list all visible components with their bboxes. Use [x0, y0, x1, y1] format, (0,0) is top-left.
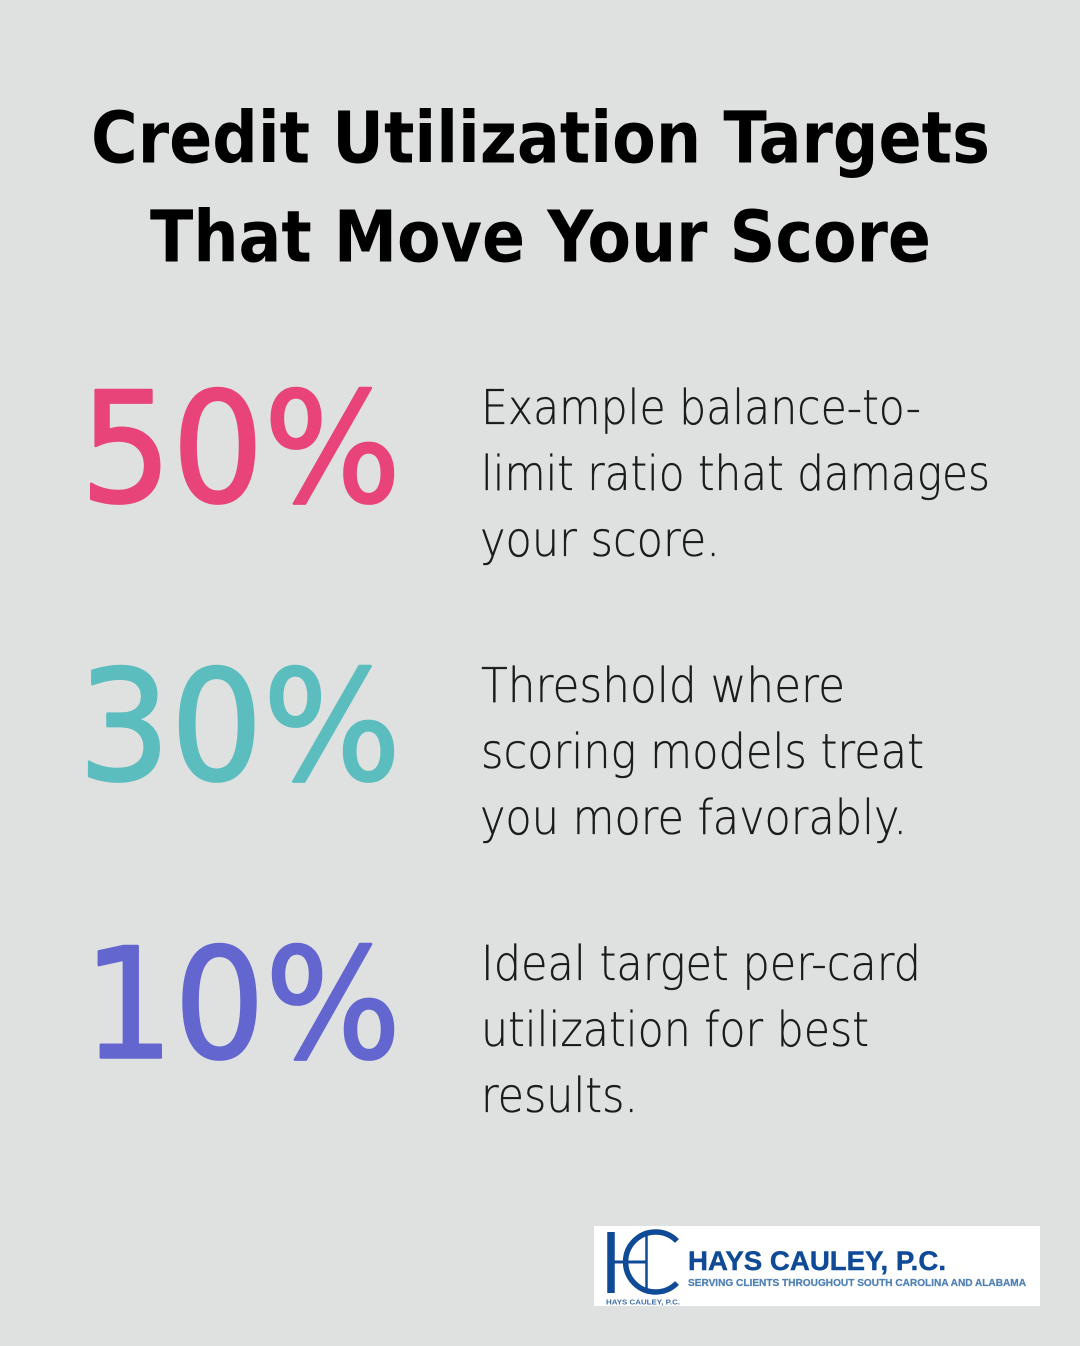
description: 50%: Example balance-to- — [481, 380, 921, 436]
description: 30%: scoring models treat — [481, 724, 924, 780]
description: 30% — [480, 658, 924, 846]
stat: 10% — [83, 916, 921, 1124]
title: That Move Your Score — [150, 196, 931, 278]
stat: 30% — [78, 638, 924, 846]
description: 50%: your score. — [480, 512, 720, 568]
description: 10% — [481, 936, 921, 1124]
description: 50%: limit ratio that damages — [481, 446, 990, 502]
number: 30%: 30% — [78, 638, 401, 816]
logo small caption: HAYS CAULEY, P.C. — [606, 1298, 680, 1306]
logo name: HAYS CAULEY, P.C. — [688, 1246, 946, 1276]
description: 30%: you more favorably. — [480, 790, 907, 846]
description: 30%: Threshold where — [481, 658, 845, 714]
stat: 50% — [80, 360, 990, 568]
description: 50% — [480, 380, 990, 568]
logo tagline: SERVING CLIENTS THROUGHOUT SOUTH CAROLINA AND ALABAMA — [688, 1277, 1026, 1289]
description: 10%: utilization for best — [481, 1002, 869, 1058]
number: 50%: 50% — [80, 360, 401, 538]
icon: HC monogram — [611, 1232, 677, 1293]
title: Credit Utilization Targets — [91, 96, 990, 180]
description: 10%: results. — [481, 1068, 638, 1124]
logo: Hays Cauley, P.C. — [594, 1226, 1040, 1306]
number: 10%: 10% — [83, 916, 401, 1094]
description: 10%: Ideal target per-card — [481, 936, 921, 992]
title — [91, 96, 990, 278]
